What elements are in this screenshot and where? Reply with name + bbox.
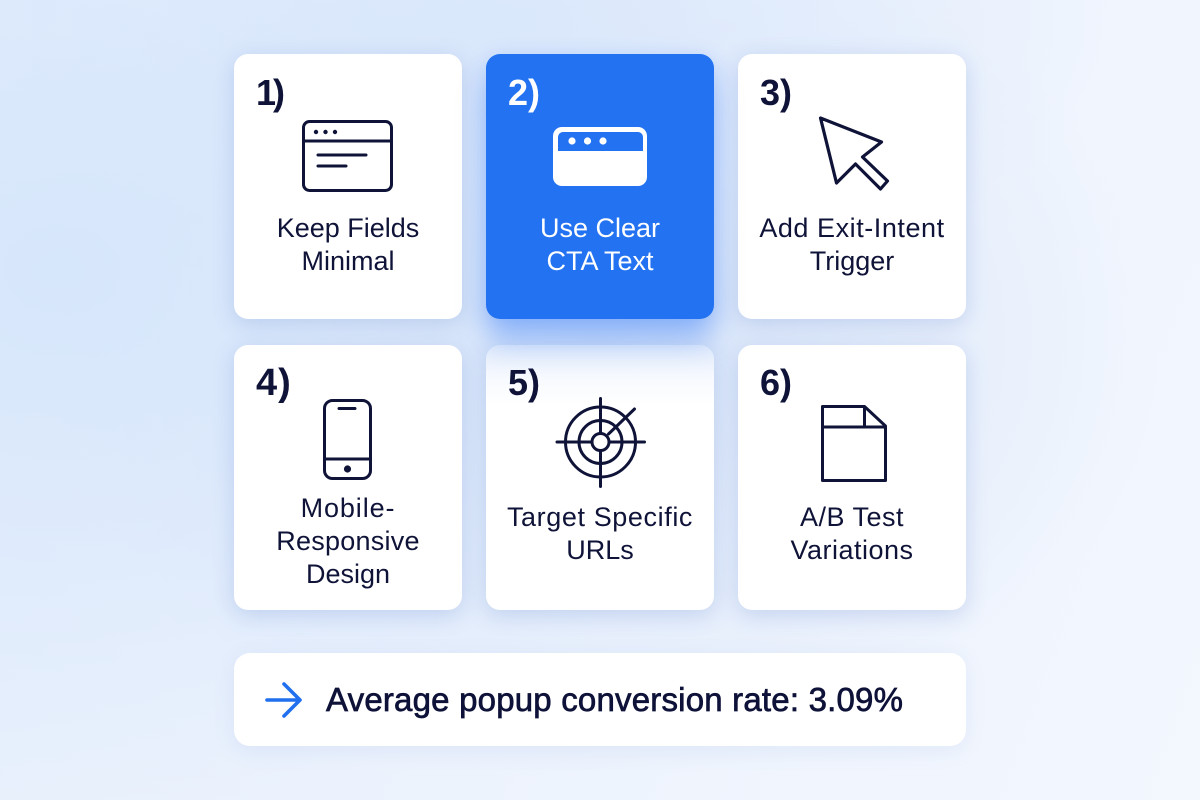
label: A/B test variations: A/B Test	[800, 502, 904, 532]
panel: average conversion rate callout	[234, 653, 966, 746]
label: keep fields minimal: Keep Fields	[277, 213, 419, 243]
icon: smartphone	[323, 399, 372, 480]
label: mobile-responsive design: Responsive	[276, 526, 420, 556]
step number 4: 4)	[256, 362, 292, 404]
label: keep fields minimal: Minimal	[301, 246, 394, 276]
icon: target crosshair	[556, 397, 646, 488]
panel: 2 use clear CTA text (highlighted)	[486, 54, 714, 319]
panel: 6 A/B test variations	[738, 345, 966, 610]
icon: document with folded corner	[821, 405, 887, 482]
label: add exit-intent trigger	[759, 213, 945, 276]
panel: 3 add exit-intent trigger	[738, 54, 966, 319]
step number 3: 3)	[760, 72, 792, 113]
step number 5: 5)	[508, 362, 540, 403]
label: keep fields minimal	[277, 213, 419, 276]
label: use clear CTA text	[540, 213, 660, 276]
label: add exit-intent trigger: Add Exit-Intent	[759, 213, 945, 243]
label: mobile-responsive design	[276, 493, 420, 589]
label: A/B test variations: Variations	[790, 535, 914, 565]
step number 2: 2)	[508, 72, 540, 113]
label: mobile-responsive design: Mobile-	[301, 493, 395, 523]
label: target specific URLs: URLs	[566, 535, 634, 565]
label: add exit-intent trigger: Trigger	[810, 246, 894, 276]
step number 6: 6)	[760, 362, 792, 403]
callout text: Average popup conversion rate: 3.09%	[326, 681, 903, 718]
label: use clear CTA text: CTA Text	[546, 246, 654, 276]
label: target specific URLs: Target Specific	[507, 502, 693, 532]
icon: solid browser window	[553, 127, 647, 186]
icon: browser window with text lines	[302, 120, 393, 192]
label: target specific URLs	[507, 502, 693, 565]
label: mobile-responsive design: Design	[306, 559, 390, 589]
panel: 5 target specific URLs	[486, 345, 714, 610]
panel: 1 keep fields minimal	[234, 54, 462, 319]
panel: 4 mobile-responsive design	[234, 345, 462, 610]
icon: blue arrow	[265, 682, 302, 718]
label: use clear CTA text: Use Clear	[540, 213, 660, 243]
step number 1: 1)	[256, 72, 282, 113]
label: A/B test variations	[790, 502, 914, 565]
icon: mouse cursor arrow	[818, 116, 890, 191]
